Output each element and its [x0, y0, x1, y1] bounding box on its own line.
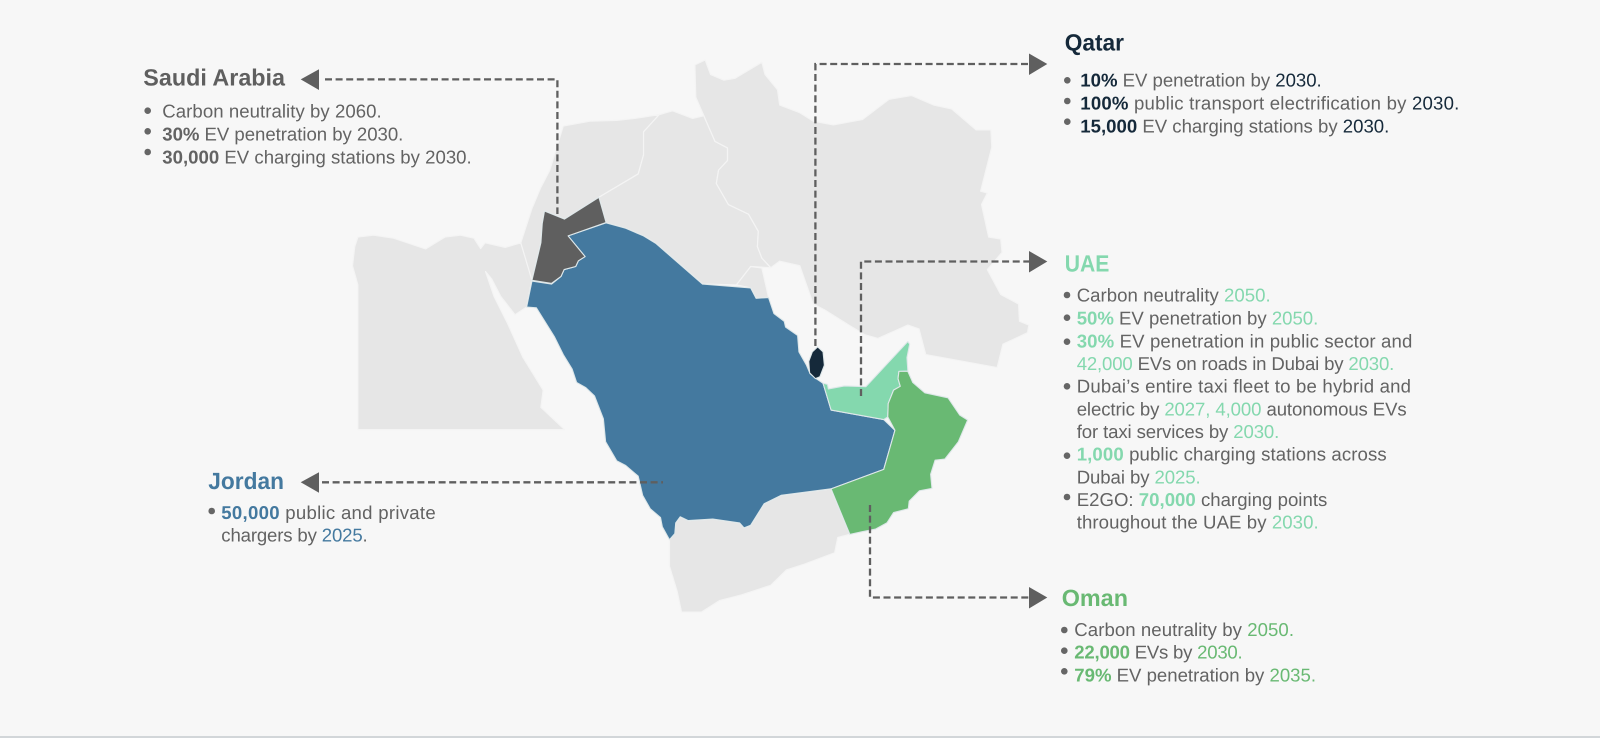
bullet list: UAE targets: electric by 2027, 4,000 autonomous EVs	[1077, 398, 1407, 419]
arrow: UAE leader	[861, 251, 1047, 396]
map of the Gulf region	[353, 60, 1029, 612]
bullet list: Oman targets: Carbon neutrality by 2050.	[1074, 619, 1294, 640]
bullet list: UAE targets: Carbon neutrality 2050.	[1077, 285, 1271, 306]
bullet list: Qatar targets: 10% EV penetration by 2030.	[1080, 70, 1322, 91]
heading: UAE: UAE	[1065, 251, 1109, 277]
bullet list: Qatar targets: 15,000 EV charging stations by 2030.	[1080, 115, 1389, 136]
country: Qatar region in navy	[809, 347, 824, 379]
country: Syria and Levant	[521, 115, 659, 280]
country: Jordan region in dark grey	[532, 197, 606, 283]
bullet list: UAE targets	[1064, 285, 1412, 533]
country: Iran	[695, 60, 1029, 368]
panel: Qatar	[1064, 30, 1459, 136]
country: Kuwait	[736, 267, 769, 298]
country: Oman region in green	[831, 371, 968, 534]
bullet list: Saudi Arabia targets: 30,000 EV charging stations by 2030.	[162, 146, 472, 167]
bullet list: Oman targets	[1061, 619, 1316, 685]
bullet list: UAE targets: 50% EV penetration by 2050.	[1077, 307, 1318, 328]
bullet list: UAE targets: Dubai’s entire taxi fleet to be hybrid and	[1077, 376, 1411, 397]
bullet list: UAE targets: 30% EV penetration in public sector and	[1077, 330, 1412, 351]
heading: Qatar: Qatar	[1065, 30, 1124, 56]
heading: Oman: Oman	[1062, 585, 1128, 611]
bullet list: Saudi Arabia targets: 30% EV penetration by 2030.	[162, 123, 403, 144]
panel: Oman	[1061, 585, 1316, 685]
bullet list: UAE targets: 42,000 EVs on roads in Dubai by 2030.	[1077, 353, 1394, 374]
arrow: Jordan leader	[301, 472, 663, 493]
bullet list: Jordan targets: 50,000 public and private	[221, 502, 436, 523]
bullet list: Saudi Arabia targets	[144, 101, 472, 167]
country: UAE region in mint	[823, 342, 910, 420]
country: Egypt	[353, 235, 565, 430]
country: Iraq	[599, 111, 771, 285]
panel: Jordan	[208, 468, 436, 546]
panel: Saudi Arabia	[143, 65, 472, 167]
bullet list: Jordan targets: chargers by 2025.	[221, 525, 368, 546]
bullet list: UAE targets: Dubai by 2025.	[1077, 466, 1201, 487]
bullet list: Jordan targets	[208, 502, 436, 546]
heading: Saudi Arabia: Saudi Arabia	[143, 65, 286, 91]
bullet list: UAE targets: 1,000 public charging stations across	[1077, 444, 1387, 465]
bullet list: UAE targets: for taxi services by 2030.	[1077, 421, 1279, 442]
bullet list: Oman targets: 22,000 EVs by 2030.	[1074, 642, 1243, 663]
bullet list: Oman targets: 79% EV penetration by 2035.	[1074, 664, 1316, 685]
arrow: Oman leader	[870, 505, 1047, 608]
bullet list: UAE targets: throughout the UAE by 2030.	[1077, 512, 1319, 533]
bullet list: Qatar targets	[1064, 70, 1459, 136]
arrow: Saudi Arabia leader	[301, 69, 557, 214]
bullet list: UAE targets: E2GO: 70,000 charging points	[1077, 489, 1327, 510]
bullet list: Qatar targets: 100% public transport electrification by 2030.	[1080, 92, 1459, 113]
bullet list: Saudi Arabia targets: Carbon neutrality by 2060.	[162, 101, 382, 122]
country: Yemen	[669, 489, 850, 612]
panel: UAE	[1064, 251, 1412, 533]
country: Saudi Arabia region in blue	[527, 223, 895, 540]
heading: Jordan: Jordan	[208, 468, 284, 494]
arrow: Qatar leader	[815, 54, 1047, 346]
